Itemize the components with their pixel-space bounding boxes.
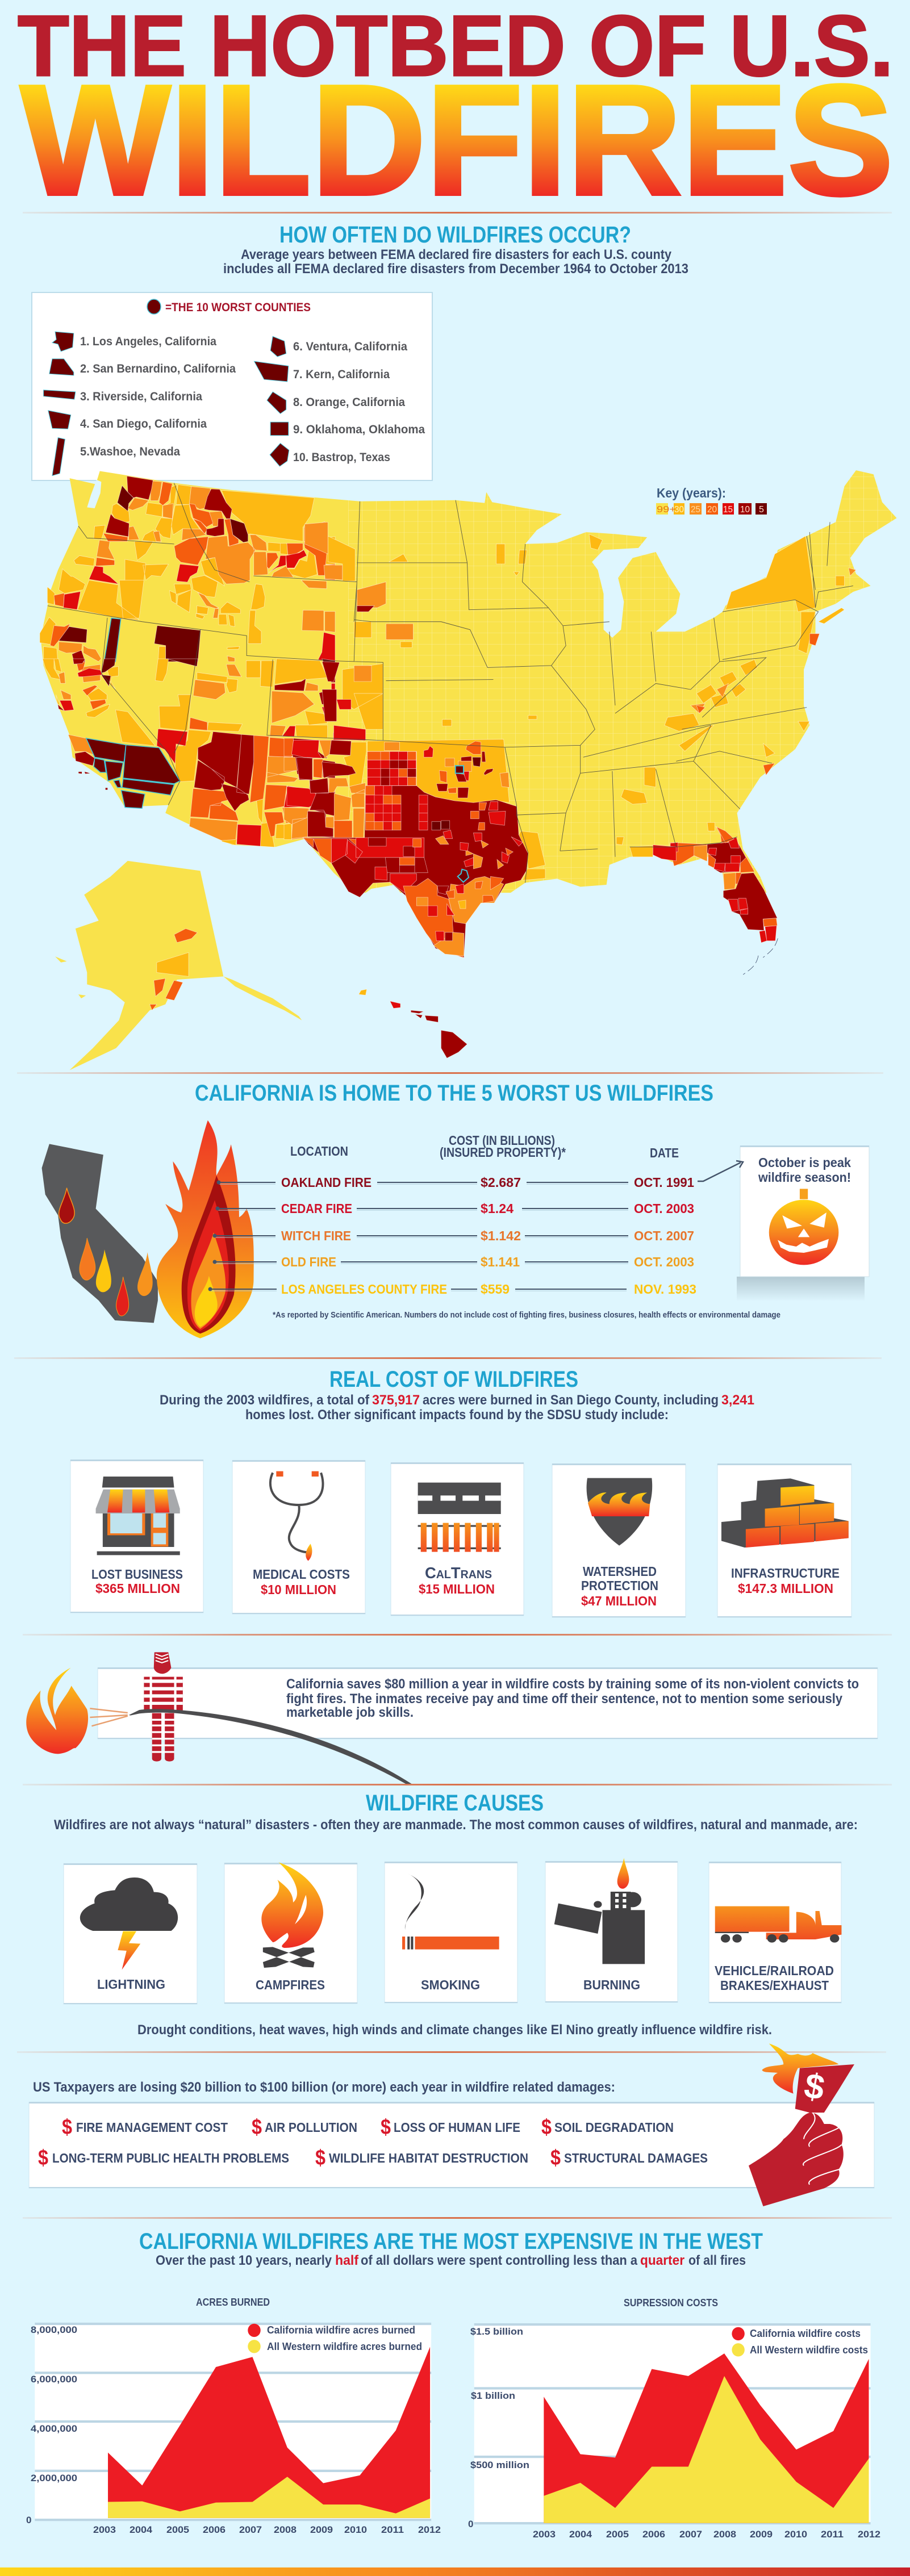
intro text: half and quarter: of all dollars were spent controlling less than a	[361, 2253, 638, 2268]
heading: wildfire causes: WILDFIRE CAUSES	[366, 1791, 544, 1816]
chart: suppression costs: 2004	[569, 2529, 592, 2540]
row: oakland fire	[281, 1175, 694, 1190]
panel: 10 worst counties: 7. Kern, California	[293, 368, 390, 381]
title line: wildfires: WILDFIRES	[20, 53, 894, 228]
intro text: real cost: During the 2003 wildfires, a total of	[160, 1392, 370, 1408]
panel: 10 worst counties: =THE 10 WORST COUNTIES	[165, 301, 311, 314]
intro text: half and quarter: of all fires	[688, 2253, 746, 2268]
icon: stethoscope	[270, 1471, 323, 1561]
card: smoking	[385, 1862, 517, 2003]
row: cedar fire: OCT. 2003	[634, 1201, 694, 1216]
northwest counties	[40, 476, 335, 662]
panel: 10 worst counties: 6. Ventura, California	[293, 340, 407, 353]
intro text: real cost: homes lost. Other significant impacts found by the SDSU study include:	[245, 1407, 669, 1423]
panel: 10 worst counties: 4. San Diego, California	[80, 417, 207, 430]
icon: cloud and bolt	[80, 1877, 178, 1969]
intro text: real cost	[160, 1392, 754, 1423]
card: caltrans: $15 MILLION	[419, 1582, 495, 1596]
card: infrastructure	[717, 1463, 851, 1617]
connector lines	[208, 1180, 628, 1291]
heading: real cost of wildfires: REAL COST OF WILDFIRES	[329, 1367, 578, 1392]
chart: suppression costs: 2008	[713, 2529, 736, 2540]
row: oakland fire: $2.687	[481, 1175, 521, 1190]
panel: damages list: LOSS OF HUMAN LIFE	[394, 2120, 520, 2135]
icon: road and fence	[418, 1483, 501, 1552]
callout: october peak season	[698, 1145, 869, 1302]
intro text: real cost: 375,917	[372, 1392, 420, 1408]
intro text: half and quarter: half	[335, 2253, 359, 2268]
card: caltrans: CALTRANS	[425, 1564, 492, 1582]
chart: suppression costs	[468, 2297, 880, 2540]
card: campfires: CAMPFIRES	[256, 1977, 325, 1992]
text: taxpayers losing: US Taxpayers are losing $20 billion to $100 billion (or more) each year in wildfire related damages:	[33, 2080, 615, 2095]
panel: damages list: LONG-TERM PUBLIC HEALTH PROBLEMS	[52, 2151, 289, 2165]
chart: suppression costs: 2010	[784, 2529, 807, 2540]
central grid	[365, 785, 479, 830]
intro text: half and quarter	[156, 2253, 746, 2268]
map key	[656, 486, 767, 515]
chart: suppression costs: 2007	[679, 2529, 702, 2540]
Florida counties	[670, 822, 778, 975]
chart: acres burned: 2,000,000	[31, 2473, 77, 2483]
subtitle text: includes all FEMA declared fire disasters from December 1964 to October 2013	[223, 261, 688, 277]
lower 48 base	[0, 454, 910, 893]
panel: damages list: $	[62, 2115, 72, 2139]
row: los angeles county fire	[281, 1282, 696, 1297]
eastern patches, Alaska, Hawaii, state lines	[48, 483, 856, 1070]
chart: acres burned: 2003	[93, 2524, 116, 2535]
card: medical costs	[232, 1460, 365, 1614]
chart: suppression costs: 2009	[750, 2529, 773, 2540]
card: smoking: SMOKING	[421, 1977, 480, 1992]
text: climate influence: Drought conditions, heat waves, high winds and climate changes like El Nino greatly influence wildfire risk.	[137, 2022, 772, 2038]
state lines	[48, 483, 853, 883]
chart: acres burned: 2012	[418, 2524, 441, 2535]
heading: california worst wildfires: CALIFORNIA IS HOME TO THE 5 WORST US WILDFIRES	[195, 1081, 713, 1106]
water spray	[90, 1708, 128, 1726]
map key: 15	[723, 505, 733, 515]
icon: cigarette	[402, 1874, 499, 1950]
panhandle grid	[368, 751, 416, 785]
Hawaii	[411, 1010, 467, 1058]
Alaska	[55, 861, 302, 1070]
chart: acres burned: 2006	[203, 2524, 226, 2535]
big west Texas	[303, 838, 359, 863]
card: burning: BURNING	[583, 1977, 640, 1992]
map key: 99+	[657, 505, 676, 515]
card: vehicle railroad brakes exhaust	[709, 1862, 841, 2003]
chart: acres burned: 0	[26, 2515, 31, 2525]
flame	[26, 1668, 88, 1754]
card: lost business	[70, 1460, 203, 1613]
card: infrastructure: $147.3 MILLION	[738, 1581, 833, 1596]
panel: convict firefighters: California saves $80 million a year in wildfire costs by training some of its non-violent convicts to	[286, 1676, 859, 1692]
row: cedar fire	[281, 1201, 694, 1216]
table: worst wildfires	[208, 1133, 696, 1297]
map key: 30	[674, 505, 684, 515]
Texas base	[303, 785, 528, 958]
card: caltrans	[391, 1462, 524, 1616]
panel: damages list: $	[541, 2115, 552, 2139]
chart: acres burned: All Western wildfire acres burned	[267, 2341, 422, 2352]
panel: damages list	[29, 2102, 874, 2188]
card: watershed protection: WATERSHED	[583, 1564, 657, 1579]
row: old fire: OLD FIRE	[281, 1254, 336, 1269]
chart: suppression costs: All Western wildfire costs	[750, 2344, 868, 2356]
card: lost business: LOST BUSINESS	[91, 1567, 183, 1582]
panel: 10 worst counties: 2. San Bernardino, California	[80, 362, 236, 375]
intro text: real cost: acres were burned in San Diego County, including	[423, 1392, 719, 1408]
panel: 10 worst counties: 9. Oklahoma, Oklahoma	[293, 423, 425, 436]
row: los angeles county fire: LOS ANGELES COUNTY FIRE	[281, 1282, 447, 1297]
card: watershed protection	[552, 1463, 686, 1617]
south Texas	[403, 879, 464, 958]
card: watershed protection: $47 MILLION	[581, 1594, 657, 1608]
panel: convict firefighters	[98, 1667, 878, 1739]
heading: how often do wildfires occur: HOW OFTEN DO WILDFIRES OCCUR?	[279, 221, 631, 248]
panel: damages list: $	[381, 2115, 391, 2139]
row: witch fire: $1.142	[481, 1228, 521, 1243]
table headers: COST (IN BILLIONS)	[449, 1133, 555, 1148]
panel: damages list: $	[550, 2146, 561, 2170]
icon: bricks	[721, 1478, 849, 1548]
panel: convict firefighters: marketable job skills.	[286, 1705, 414, 1720]
choropleth map of the US	[0, 454, 910, 1070]
row: old fire: $1.141	[481, 1254, 520, 1269]
table headers	[290, 1133, 679, 1160]
card: campfires	[224, 1862, 357, 2004]
table headers: DATE	[650, 1145, 679, 1160]
california map with flames	[42, 1144, 158, 1323]
icon: pumpkin	[769, 1189, 838, 1265]
chart: acres burned: 8,000,000	[31, 2324, 77, 2335]
southwest counties	[43, 659, 335, 847]
heading: california most expensive: CALIFORNIA WILDFIRES ARE THE MOST EXPENSIVE IN THE WEST	[139, 2229, 763, 2254]
chart: suppression costs: $1.5 billion	[470, 2326, 523, 2337]
chart: acres burned: 2011	[381, 2524, 404, 2535]
row: cedar fire: $1.24	[481, 1201, 514, 1216]
chart: acres burned: 2009	[310, 2524, 333, 2535]
chart: suppression costs: 2005	[606, 2529, 629, 2540]
panel: damages list: AIR POLLUTION	[265, 2120, 357, 2135]
chart: suppression costs: SUPRESSION COSTS	[624, 2297, 718, 2309]
icon: hand holding burning dollar: $	[802, 2066, 828, 2108]
card: lightning	[64, 1863, 197, 2004]
card: medical costs: $10 MILLION	[261, 1582, 336, 1597]
hose	[129, 1709, 412, 1784]
map key: 25	[691, 505, 700, 515]
chart: acres burned: 2005	[166, 2524, 189, 2535]
prisoner	[144, 1652, 183, 1762]
icon: prisoner with hose and flame	[26, 1652, 412, 1784]
row: witch fire	[281, 1228, 694, 1243]
chart: suppression costs: California wildfire costs	[750, 2328, 861, 2339]
arrow	[698, 1161, 743, 1181]
panel: 10 worst counties: 8. Orange, California	[293, 396, 405, 409]
icon: campfire	[261, 1862, 323, 1968]
chart: acres burned: 2004	[130, 2524, 153, 2535]
chart: suppression costs: 2011	[821, 2529, 844, 2540]
row: witch fire: OCT. 2007	[634, 1228, 694, 1243]
Oklahoma and Texas counties	[284, 733, 545, 958]
icon: store	[96, 1477, 180, 1555]
chart: suppression costs: 2006	[642, 2529, 665, 2540]
title line: the hotbed of u.s.: THE HOTBED OF U.S.	[18, 0, 894, 94]
card: lost business: $365 MILLION	[95, 1581, 180, 1596]
row: cedar fire: CEDAR FIRE	[281, 1201, 352, 1216]
panel: 10 worst counties: 1. Los Angeles, California	[80, 335, 216, 348]
icon: lighter	[554, 1858, 645, 1964]
map key: 10	[740, 505, 750, 515]
card: burning	[545, 1858, 678, 2002]
big flame	[157, 1120, 254, 1339]
chart: acres burned: California wildfire acres burned	[267, 2324, 415, 2336]
callout: october peak season: October is peak	[758, 1155, 851, 1170]
table headers: (INSURED PROPERTY)*	[440, 1145, 566, 1160]
callout: october peak season: wildfire season!	[758, 1170, 851, 1185]
row: old fire	[281, 1254, 694, 1269]
map key: 20	[707, 505, 717, 515]
panel: damages list: $	[38, 2146, 48, 2170]
panel: 10 worst counties: 10. Bastrop, Texas	[293, 451, 390, 464]
panel: damages list: STRUCTURAL DAMAGES	[564, 2151, 708, 2165]
row: witch fire: WITCH FIRE	[281, 1228, 351, 1243]
subtitle text: Average years between FEMA declared fire disasters for each U.S. county	[241, 247, 672, 262]
card: medical costs: MEDICAL COSTS	[253, 1567, 350, 1582]
panel: damages list: SOIL DEGRADATION	[554, 2120, 674, 2135]
chart: acres burned: ACRES BURNED	[196, 2297, 270, 2308]
intro text: half and quarter: quarter	[640, 2253, 684, 2268]
intro text: half and quarter: Over the past 10 years, nearly	[156, 2253, 332, 2268]
panel: damages list: $	[252, 2115, 262, 2139]
chart: suppression costs: 0	[468, 2519, 473, 2529]
icon: truck	[715, 1906, 841, 1943]
chart: suppression costs: $500 million	[470, 2460, 529, 2470]
footer gradient strip	[0, 2567, 910, 2576]
card: watershed protection: PROTECTION	[581, 1578, 658, 1593]
chart: suppression costs: $1 billion	[471, 2390, 515, 2401]
chart: acres burned	[26, 2297, 441, 2535]
table headers: LOCATION	[290, 1144, 348, 1159]
panel: damages list: $	[315, 2146, 325, 2170]
chart: suppression costs: 2003	[533, 2529, 556, 2540]
icon: hand holding burning dollar	[749, 2043, 854, 2206]
panel: damages list: WILDLIFE HABITAT DESTRUCTION	[329, 2151, 528, 2165]
chart: acres burned: 2007	[239, 2524, 262, 2535]
panel: damages list: FIRE MANAGEMENT COST	[76, 2120, 228, 2135]
map key: Key (years):	[657, 486, 726, 500]
map key: 5	[759, 505, 764, 515]
panel: 10 worst counties: 5.Washoe, Nevada	[80, 445, 180, 458]
footnote: *As reported by Scientific American. Numbers do not include cost of fighting fires, business closures, health effects or environmental damage	[273, 1310, 780, 1320]
row: old fire: OCT. 2003	[634, 1254, 694, 1269]
chart: acres burned: 2008	[274, 2524, 297, 2535]
chart: acres burned: 4,000,000	[31, 2423, 77, 2434]
chart: suppression costs: 2012	[858, 2529, 880, 2540]
panel: convict firefighters: fight fires. The inmates receive pay and time off their sentence, not to mention some seriously	[286, 1691, 843, 1707]
card: vehicle railroad brakes exhaust: BRAKES/EXHAUST	[720, 1978, 829, 1993]
chart: acres burned: 6,000,000	[31, 2374, 77, 2385]
row: oakland fire: OAKLAND FIRE	[281, 1175, 371, 1190]
card: lightning: LIGHTNING	[97, 1977, 165, 1992]
subtitle text	[223, 247, 688, 277]
panel: 10 worst counties: 3. Riverside, California	[80, 390, 202, 403]
chart: acres burned: 2010	[344, 2524, 367, 2535]
icon: shield with flames	[587, 1478, 652, 1546]
card: vehicle railroad brakes exhaust: VEHICLE/RAILROAD	[715, 1963, 834, 1978]
row: oakland fire: OCT. 1991	[634, 1175, 694, 1190]
panel: 10 worst counties	[32, 292, 432, 480]
row: los angeles county fire: NOV. 1993	[634, 1282, 696, 1297]
card: infrastructure: INFRASTRUCTURE	[731, 1566, 840, 1580]
row: los angeles county fire: $559	[481, 1282, 510, 1297]
intro text: real cost: 3,241	[721, 1392, 754, 1408]
